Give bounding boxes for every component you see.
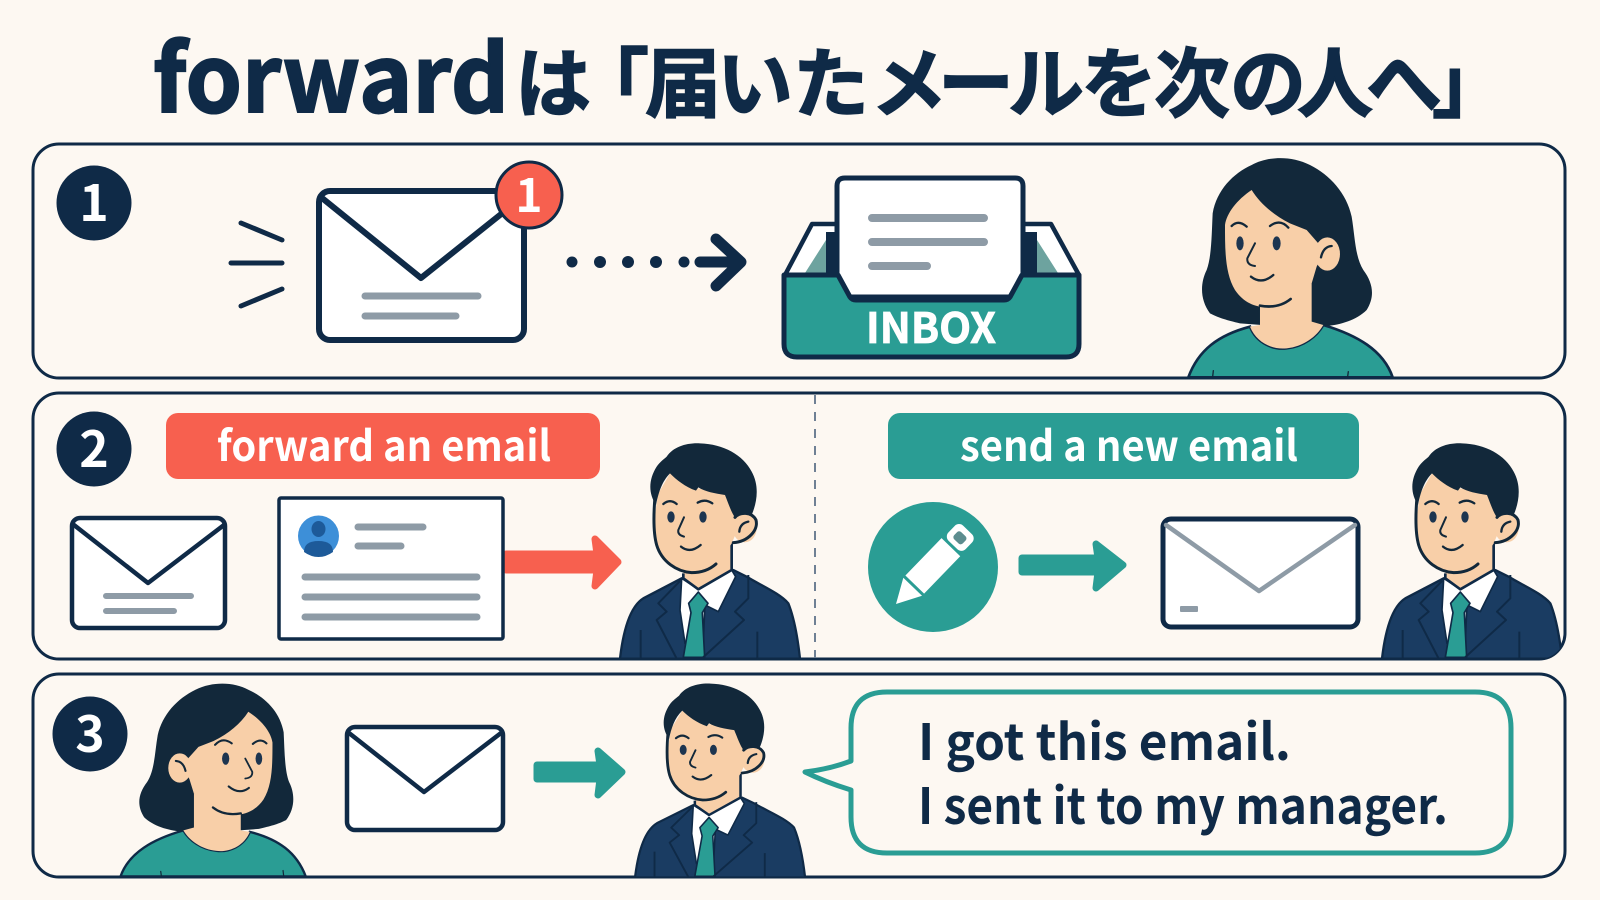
step badge 2 [56,410,132,486]
person: manager right [1382,443,1562,659]
notification badge: 1 [515,160,543,226]
speech bubble [805,692,1511,853]
icon: avatar [298,516,339,557]
step badge 3: 3 [75,695,105,767]
step badge 3 [52,695,128,772]
icon: pencil [868,502,998,632]
icon: envelope [72,518,225,628]
notification badge [496,160,562,228]
email document [279,498,503,639]
person: manager left [620,443,800,659]
person: manager [635,684,805,877]
label: send a new email: send a new email [960,413,1298,474]
icon: inbox tray [784,178,1079,357]
panel: step 3 [33,674,1565,877]
icon: inbox tray: INBOX [866,295,996,356]
icon: envelope [347,727,503,830]
label: forward an email: forward an email [217,413,551,474]
speech bubble: I got this email. [918,703,1291,775]
panel: step 1 [33,144,1565,378]
step badge 2: 2 [79,410,109,482]
panel: step 2 [33,393,1565,659]
person: woman sender [121,684,306,876]
step badge 1 [56,164,132,240]
motion lines [231,223,282,306]
person: woman receiving [1188,158,1393,377]
dotted arrow [566,239,741,286]
title: は「届いたメールを次の人へ」 [515,23,1508,133]
arrow: forward red [506,539,618,586]
icon: new email envelope [319,191,524,340]
title [153,6,1508,139]
step badge 1: 1 [79,164,109,236]
title: forward [153,6,509,139]
speech bubble: I sent it to my manager. [918,767,1448,839]
arrow: teal [1022,544,1123,588]
icon: new envelope [1163,519,1358,627]
divider [814,395,816,658]
arrow: teal [537,751,622,795]
label: send a new email [888,413,1359,479]
